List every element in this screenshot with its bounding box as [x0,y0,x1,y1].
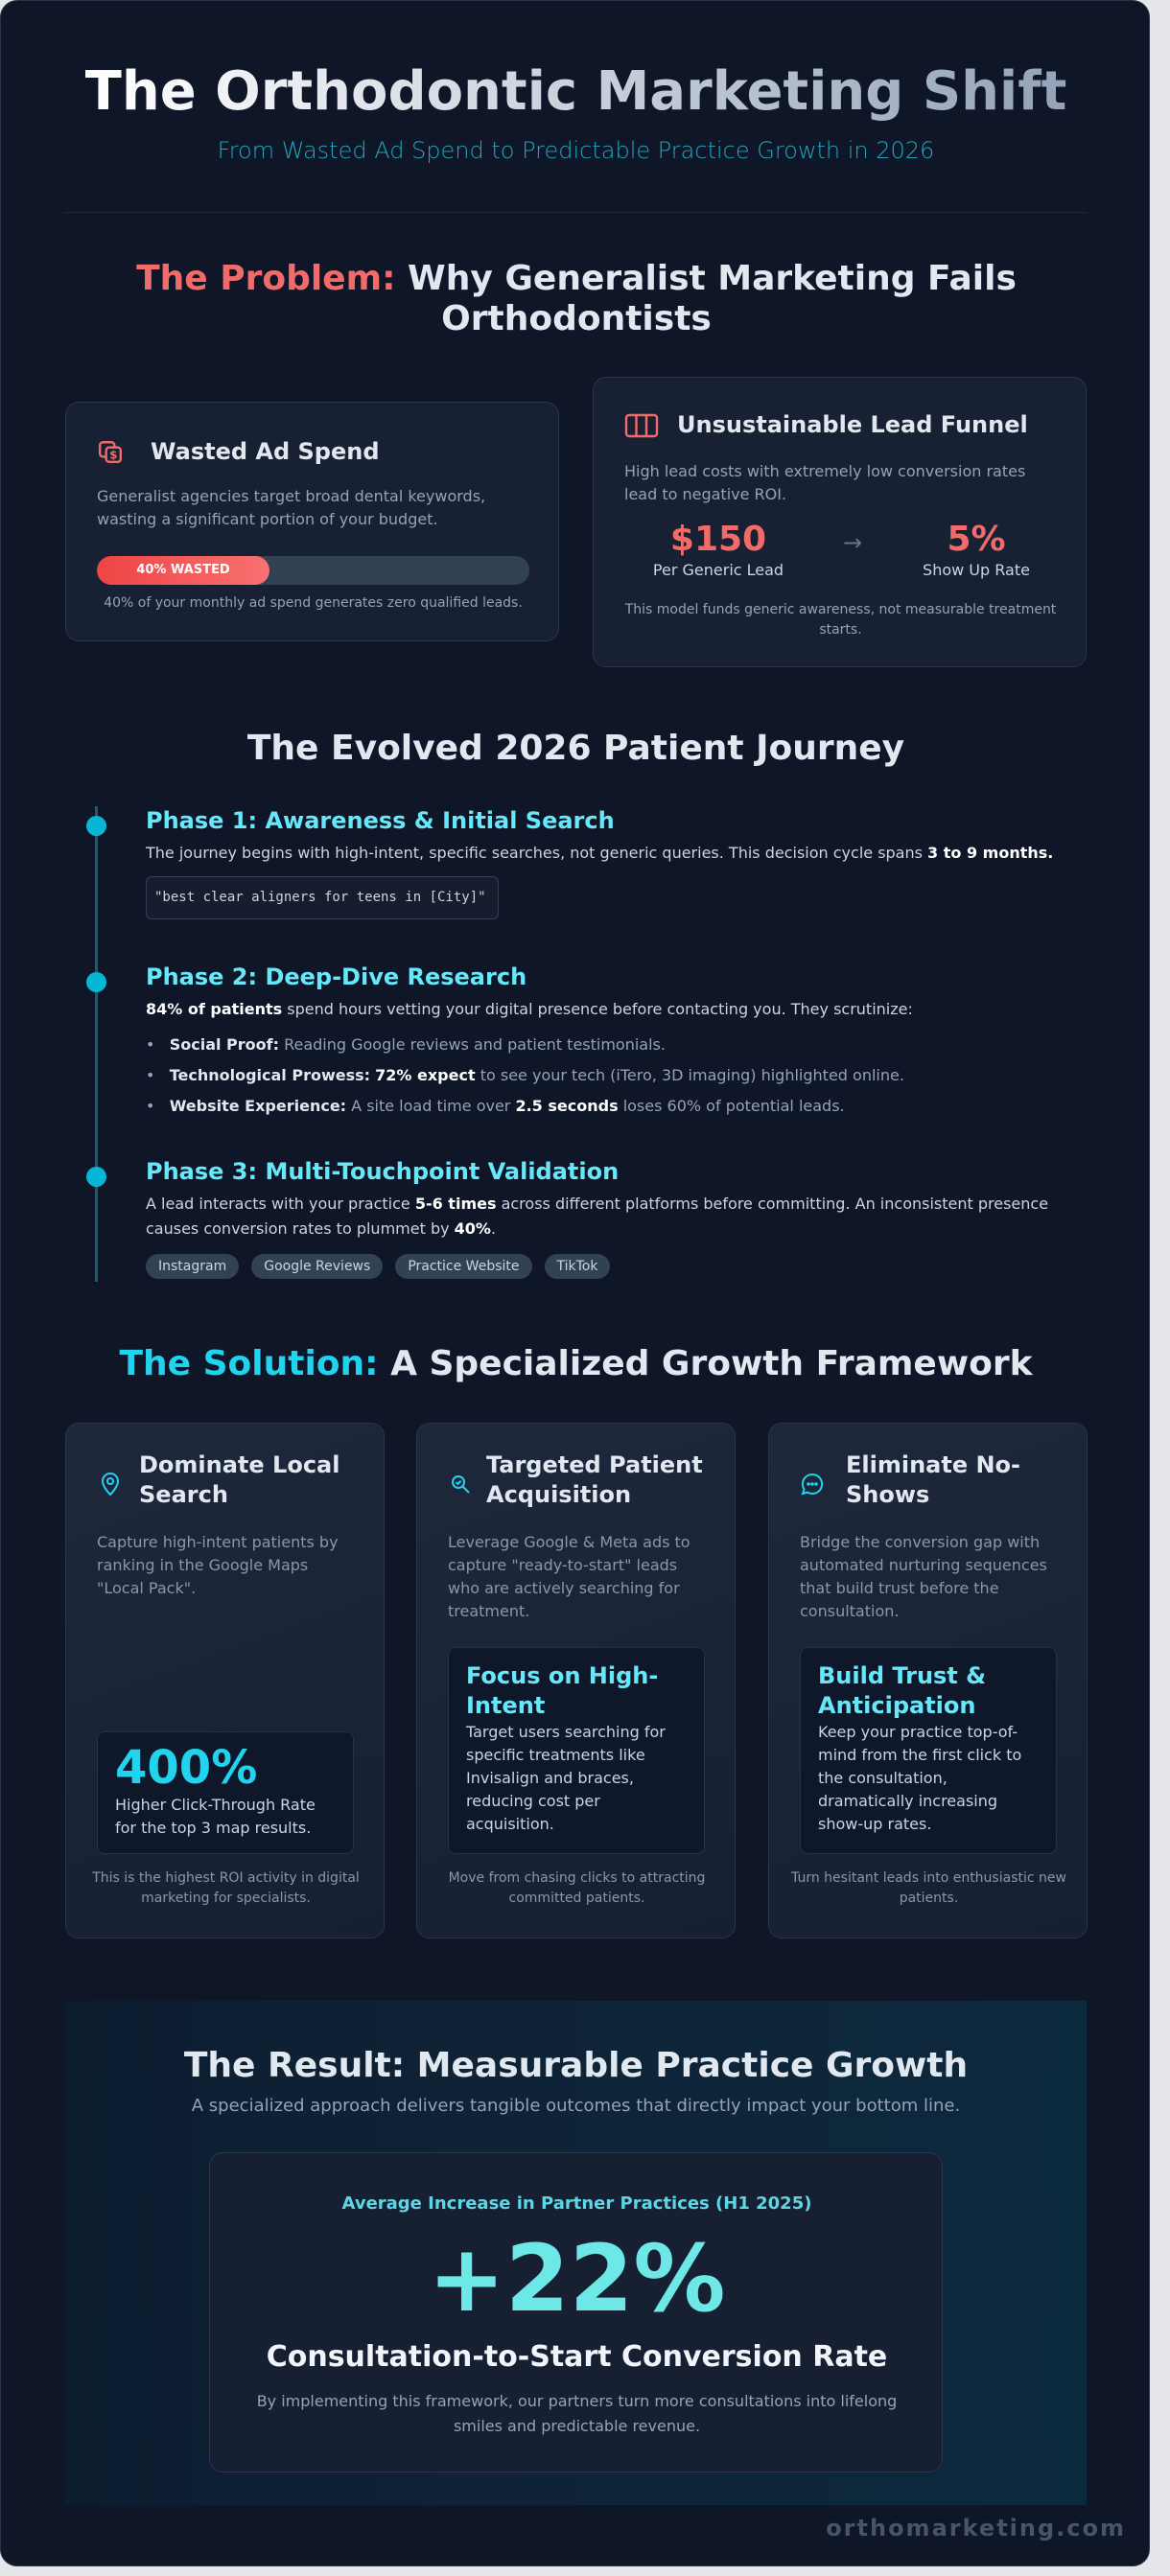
icon: search [452,1475,470,1494]
phase 1 [146,807,1053,919]
heading: Wasted Ad Spend [151,438,380,465]
heading: Eliminate No-Shows [846,1451,1020,1508]
stat card: By implementing this framework, our partners turn more consultations into lifelong smiles and predictable revenue. [257,2392,897,2435]
text: Capture high-intent patients by ranking in the Google Maps "Local Pack". [97,1533,339,1597]
timeline [86,806,106,1282]
panel: result [65,2001,1087,2505]
bar chart: 40% wasted: 40% WASTED [136,563,230,577]
title: The Orthodontic Marketing Shift [85,60,1066,123]
panel: no-shows [768,1423,1088,1938]
subtitle: From Wasted Ad Spend to Predictable Practice Growth in 2026 [218,137,934,164]
icon: money [98,441,123,463]
phase 2 [146,963,913,1115]
code box [146,876,499,919]
caption: 40% of your monthly ad spend generates zero qualified leads. [104,595,523,611]
footnote: This model funds generic awareness, not measurable treatment starts. [625,602,1056,638]
heading: The Result: Measurable Practice Growth [184,2046,968,2085]
tags: Google Reviews [264,1259,370,1274]
phase 3: Phase 3: Multi-Touchpoint Validation [146,1158,619,1185]
icon: money: $ [109,449,117,462]
panel: acquisition [416,1423,736,1938]
big number: +22% [428,2225,726,2332]
dot 3 [86,1167,106,1187]
heading: journey: The Evolved 2026 Patient Journey [247,729,904,768]
dot 1 [86,816,106,836]
callout box: Build Trust & Anticipation [818,1662,986,1719]
text: Leverage Google & Meta ads to capture "ready-to-start" leads who are actively searching for treatment. [448,1533,690,1620]
phase 3: A lead interacts with your practice 5-6 times across different platforms before committing. An inconsistent presence causes conversion rates to plummet by 40%. [146,1195,1048,1238]
arrow: → [843,529,862,556]
dot 2 [86,972,106,992]
bullet list: • Social Proof: Reading Google reviews and patient testimonials. [146,1035,666,1054]
heading: solution: The Solution: A Specialized Growth Framework [119,1344,1033,1383]
stat: $150 [653,520,784,579]
phase 1: Phase 1: Awareness & Initial Search [146,807,615,834]
stat card [209,2152,943,2472]
stat box: Higher Click-Through Rate for the top 3 map results. [115,1796,316,1837]
panel: lead funnel [593,377,1087,667]
bar chart: 40% wasted [97,556,529,585]
icon: chat [802,1474,823,1496]
phase 1: The journey begins with high-intent, specific searches, not generic queries. This decision cycle spans 3 to 9 months. [146,844,1053,862]
stat box: 400% [115,1741,257,1795]
panel: wasted ad spend [65,402,559,641]
callout box [448,1647,705,1854]
text: High lead costs with extremely low conversion rates lead to negative ROI. [624,462,1025,503]
callout box: Keep your practice top-of-mind from the first click to the consultation, dramatically increasing show-up rates. [818,1723,1021,1833]
callout box: Target users searching for specific treatments like Invisalign and braces, reducing cost per acquisition. [466,1723,666,1833]
heading: problem: The Problem: Why Generalist Marketing Fails Orthodontists [136,259,1017,338]
stat: 5%: 5% [947,520,1006,559]
footer brand: orthomarketing.com [826,2515,1126,2541]
bullet list: • Website Experience: A site load time over 2.5 seconds loses 60% of potential leads. [146,1097,845,1115]
tags: TikTok [556,1259,597,1274]
code box: "best clear aligners for teens in [City]" [154,890,486,905]
bullet list: • Technological Prowess: 72% expect to see your tech (iTero, 3D imaging) highlighted online. [146,1066,904,1084]
text: Bridge the conversion gap with automated nurturing sequences that build trust before the consultation. [800,1533,1047,1620]
stat: $150: Per Generic Lead [653,561,784,579]
icon: pin [102,1473,119,1496]
stat: $150: $150 [670,520,766,559]
callout box: Focus on High-Intent [466,1662,658,1719]
bullet list [146,1035,904,1115]
subtitle: A specialized approach delivers tangible outcomes that directly impact your bottom line. [192,2096,960,2116]
stat card: Consultation-to-Start Conversion Rate [267,2340,887,2374]
stat: 5% [923,520,1030,579]
footnote: This is the highest ROI activity in digital marketing for specialists. [92,1870,360,1906]
phase 2: Phase 2: Deep-Dive Research [146,963,526,990]
footnote: Turn hesitant leads into enthusiastic new patients. [791,1870,1066,1906]
tags: Practice Website [408,1259,520,1274]
phase 2: 84% of patients spend hours vetting your digital presence before contacting you. They scrutinize: [146,1000,913,1018]
heading: Dominate Local Search [139,1451,339,1508]
heading: Targeted Patient Acquisition [486,1451,703,1508]
icon: funnel columns [625,414,658,437]
panel: local search [65,1423,385,1938]
footnote: Move from chasing clicks to attracting committed patients. [449,1870,705,1906]
stat box [97,1731,354,1854]
heading: Unsustainable Lead Funnel [677,411,1028,438]
text: Generalist agencies target broad dental keywords, wasting a significant portion of your budget. [97,487,485,528]
callout box [800,1647,1057,1854]
tags: Instagram [158,1259,226,1274]
phase 3 [146,1158,1048,1279]
tags [146,1254,610,1279]
stat: 5%: Show Up Rate [923,561,1030,579]
stat card: Average Increase in Partner Practices (H1 2025) [342,2193,811,2214]
